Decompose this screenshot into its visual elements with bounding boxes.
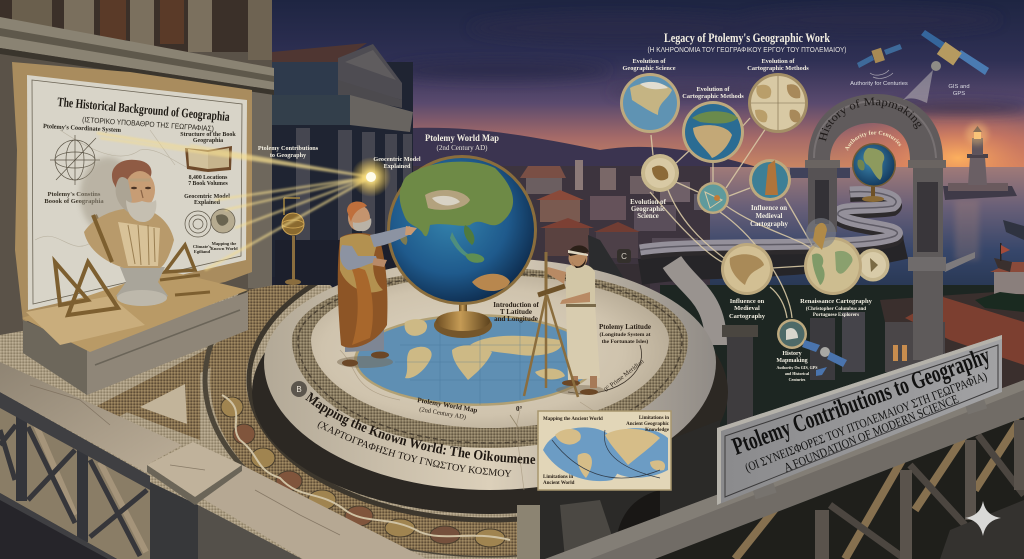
inset card: mapping the ancient world: Ancient World <box>543 481 575 486</box>
Ptolemy latitude label: the Fortunate Isles) <box>602 338 648 345</box>
icon: small globe under the arch <box>845 130 902 202</box>
medallion: history of mapmaking: Centuries <box>789 377 806 382</box>
Ptolemy latitude label <box>599 323 651 345</box>
background: distant hills <box>413 128 820 190</box>
contributions label: Ptolemy Contributions <box>258 145 319 152</box>
icon: small satellite with signal <box>850 44 908 87</box>
inset card: mapping the ancient world: Limitations in <box>543 475 573 480</box>
marker C <box>617 249 631 263</box>
geocentric model label: Explained <box>384 163 411 170</box>
curved Greek subtitle: (ΧΑΡΤΟΓΡΑΦΗΣΗ ΤΟΥ ΓΝΩΣΤΟΥ ΚΟΣΜΟΥ) <box>318 421 512 477</box>
map medallion: influence on medieval cartography: Cartography <box>729 313 766 320</box>
medallion: influence on medieval cartography, instrument: Medieval <box>756 213 783 220</box>
icon: large satellite with beam: GIS and <box>948 84 970 90</box>
prime meridian arc label: 0° Prime Meridian <box>603 358 646 394</box>
contributions label: to Geography <box>270 152 307 159</box>
figure: Ptolemy pointing at the globe <box>337 202 417 368</box>
panel Greek subtitle: (ΙΣΤΟΡΙΚΟ ΥΠΟΒΑΘΡΟ ΤΗΣ ΓΕΩΓΡΑΦΙΑΣ) <box>82 115 215 133</box>
geocentric model diagrams <box>184 194 238 254</box>
map medallion: evolution of geographic science: Geographic Science <box>622 65 676 72</box>
illustration: temple behind the globe <box>272 43 413 285</box>
map medallions: renaissance cartography: Renaissance Cartography <box>800 298 873 305</box>
icon: lighthouse <box>943 123 1017 200</box>
Ptolemy latitude label: Ptolemy Latitude <box>599 323 651 331</box>
icon: small satellite near medallion <box>802 340 847 376</box>
map medallion: evolution of cartographic methods <box>682 86 744 163</box>
marker B <box>291 381 307 397</box>
geocentric model diagrams: Geocentric Model <box>184 194 230 200</box>
connecting arrows <box>650 118 812 318</box>
contributions label <box>258 145 319 159</box>
map medallion: evolution of geographic science: Evolution of <box>632 58 666 65</box>
world map label: (2nd Century AD) <box>437 144 488 152</box>
rays of light and glow <box>97 133 391 270</box>
illustration: building wall <box>0 0 274 345</box>
medallion: history of mapmaking: Authority On GIS, GPS <box>777 365 818 370</box>
balustrade: bottom left marble rail and lattice <box>0 362 427 559</box>
inset card: mapping the ancient world: Knowledge <box>645 428 670 433</box>
floor map of the known world <box>354 314 598 406</box>
medallion: influence on medieval cartography, instrument <box>749 159 791 228</box>
inset card: mapping the ancient world: Mapping the Ancient World <box>543 417 603 422</box>
map medallions: renaissance cartography: Portuguese Explorers <box>813 313 859 318</box>
icon: four-point sparkle <box>965 501 1001 536</box>
label on inner arch: Authority for Centuries <box>845 130 902 151</box>
arch label: History of Mapmaking <box>818 98 922 142</box>
icon: large satellite with beam: GPS <box>953 91 965 97</box>
world globe <box>387 155 537 338</box>
icon: large satellite with beam <box>903 30 989 103</box>
latitude introduction label: Introduction of <box>493 301 539 309</box>
geocentric model label: Geocentric Model <box>373 156 421 163</box>
background: dock and ship <box>943 220 1024 272</box>
inset card: mapping the ancient world <box>538 411 671 490</box>
map medallion: influence on medieval cartography: Influence on <box>730 298 765 305</box>
medallion: ancient map fragment <box>630 154 679 220</box>
illustration: history of mapmaking arch <box>805 94 946 360</box>
background: harbour water <box>640 167 1024 297</box>
book structure diagram: Structure of the Book <box>180 132 236 138</box>
prime meridian arc label <box>510 345 646 430</box>
Ptolemy latitude label: (Longitude System at <box>600 331 651 338</box>
map medallions: renaissance cartography: (Christopher Columbus and <box>806 307 866 312</box>
medallion: history of mapmaking: Mapmaking <box>776 358 808 364</box>
coordinate system diagram <box>43 123 122 205</box>
globe stand <box>434 300 492 338</box>
figure: Ptolemy bust <box>80 157 174 306</box>
coordinate system diagram: Ptolemy's Constins <box>48 191 101 198</box>
floor: mosaic <box>0 285 517 559</box>
landmasses <box>399 162 513 291</box>
panel: historical background of Geographia <box>27 75 247 310</box>
background: dusk sky <box>0 0 1024 220</box>
panel title: The Historical Background of Geographia <box>57 94 231 124</box>
book structure diagram: 8,400 Locations <box>189 175 228 181</box>
medallion: ancient map fragment: Geographic <box>631 206 665 213</box>
map medallion: evolution of cartographic methods, parchment chart: Cartographic Methods <box>747 65 809 72</box>
figure: assistant with tripod instrument <box>524 245 604 397</box>
legacy Greek subtitle: (Η ΚΛΗΡΟΝΟΜΙΑ ΤΟΥ ΓΕΩΓΡΑΦΙΚΟΥ ΕΡΓΟΥ ΤΟΥ ΠΤΟΛΕΜΑΙΟΥ) <box>648 47 846 54</box>
floor map caption: Ptolemy World Map <box>417 396 478 415</box>
floor map caption: (2nd Century AD) <box>419 406 466 421</box>
background: lower right town and trees <box>660 262 1024 559</box>
geocentric model diagrams: Explained <box>194 200 221 206</box>
rail pedestal cap <box>147 442 242 497</box>
armillary sphere on stand <box>282 198 304 285</box>
medallion: history of mapmaking <box>776 319 818 382</box>
plaque: Ptolemy contributions to geography <box>717 335 1002 505</box>
book structure diagram: Geographia <box>193 138 223 144</box>
medallion: central map node <box>697 182 729 214</box>
medallion: ancient map fragment: Science <box>637 213 659 220</box>
map medallion: evolution of cartographic methods, parchment chart: Evolution of <box>761 58 795 65</box>
world map label <box>425 134 499 152</box>
balustrade: bottom right rail and lattice <box>545 380 1024 559</box>
map medallion: evolution of geographic science <box>620 58 680 133</box>
panel: parchment backing <box>12 62 252 322</box>
medallion: influence on medieval cartography, instrument: Influence on <box>751 205 787 212</box>
panel: marble platform <box>264 258 716 490</box>
medallion: history of mapmaking: and Historical <box>785 371 810 376</box>
panel: legacy of Ptolemy's geographic work <box>620 31 890 382</box>
map medallion: influence on medieval cartography: Medieval <box>734 305 760 312</box>
geocentric model diagrams: Mapping the <box>212 241 236 246</box>
marker B: B <box>296 385 302 394</box>
map medallion: influence on medieval cartography <box>721 243 773 320</box>
inset card: mapping the ancient world: Limitations in <box>639 416 669 421</box>
medallion: influence on medieval cartography, instrument: Cartography <box>750 221 788 228</box>
legacy title: Legacy of Ptolemy's Geographic Work <box>664 31 830 45</box>
map medallion: evolution of cartographic methods: Cartographic Methods <box>682 93 744 100</box>
plaque tagline: A FOUNDATION OF MODERN SCIENCE <box>782 392 961 475</box>
book structure diagram <box>180 132 236 187</box>
map medallion: evolution of cartographic methods: Evolution of <box>696 86 730 93</box>
medallion: history of mapmaking: History <box>782 351 802 357</box>
geocentric model diagrams: Climate's <box>193 244 211 249</box>
table with parchment and tools <box>22 215 248 395</box>
coordinate system diagram: Boook of Geographia <box>44 198 104 205</box>
zero degree mark: 0° <box>516 405 522 413</box>
background: sunset city <box>413 160 716 296</box>
coordinate system diagram: Ptolemy's Coordinate System <box>43 123 122 134</box>
map medallions: renaissance cartography <box>800 218 890 318</box>
marker C: C <box>621 252 627 261</box>
book structure diagram: 7 Book Volumes <box>188 181 229 187</box>
geocentric model diagrams: Egiliand <box>194 249 211 254</box>
light labels <box>258 134 499 170</box>
medallion: ancient map fragment: Evolution of <box>630 199 667 206</box>
map medallion: evolution of cartographic methods, parchment chart <box>747 58 809 133</box>
illustration: colonnade under the walkway <box>722 312 865 425</box>
platform labels <box>291 301 651 477</box>
geocentric model label <box>373 156 421 170</box>
curved title: mapping the known world: Mapping the Known World: The Oikoumene <box>305 392 536 464</box>
illustration: platform base and step <box>252 270 728 559</box>
world map label: Ptolemy World Map <box>425 134 499 144</box>
latitude introduction label <box>493 301 539 323</box>
illustration: marble walkway to the arch <box>640 192 905 345</box>
latitude introduction label: T Latitude <box>500 308 532 316</box>
inset card: mapping the ancient world: Ancient Geographic <box>626 422 670 427</box>
geocentric model diagrams: Known World <box>210 246 238 251</box>
icon: small satellite with signal: Authority for Centuries <box>850 81 908 87</box>
latitude introduction label: and Longitude <box>494 315 538 323</box>
